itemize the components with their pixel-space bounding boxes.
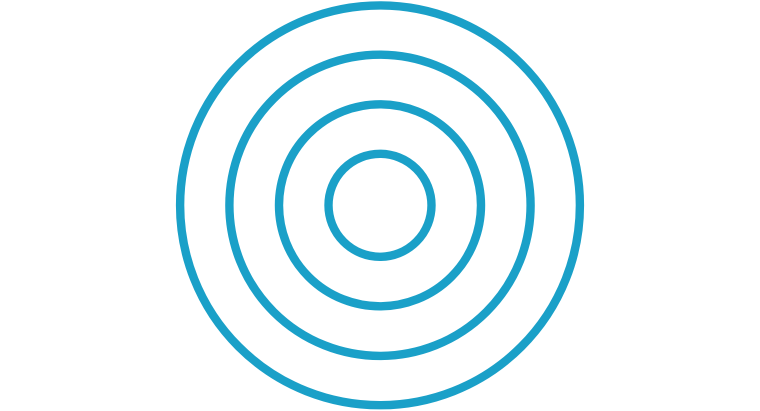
second ring (279, 104, 481, 306)
third ring (229, 55, 531, 356)
inner ring (328, 154, 432, 257)
outer ring (180, 5, 580, 405)
